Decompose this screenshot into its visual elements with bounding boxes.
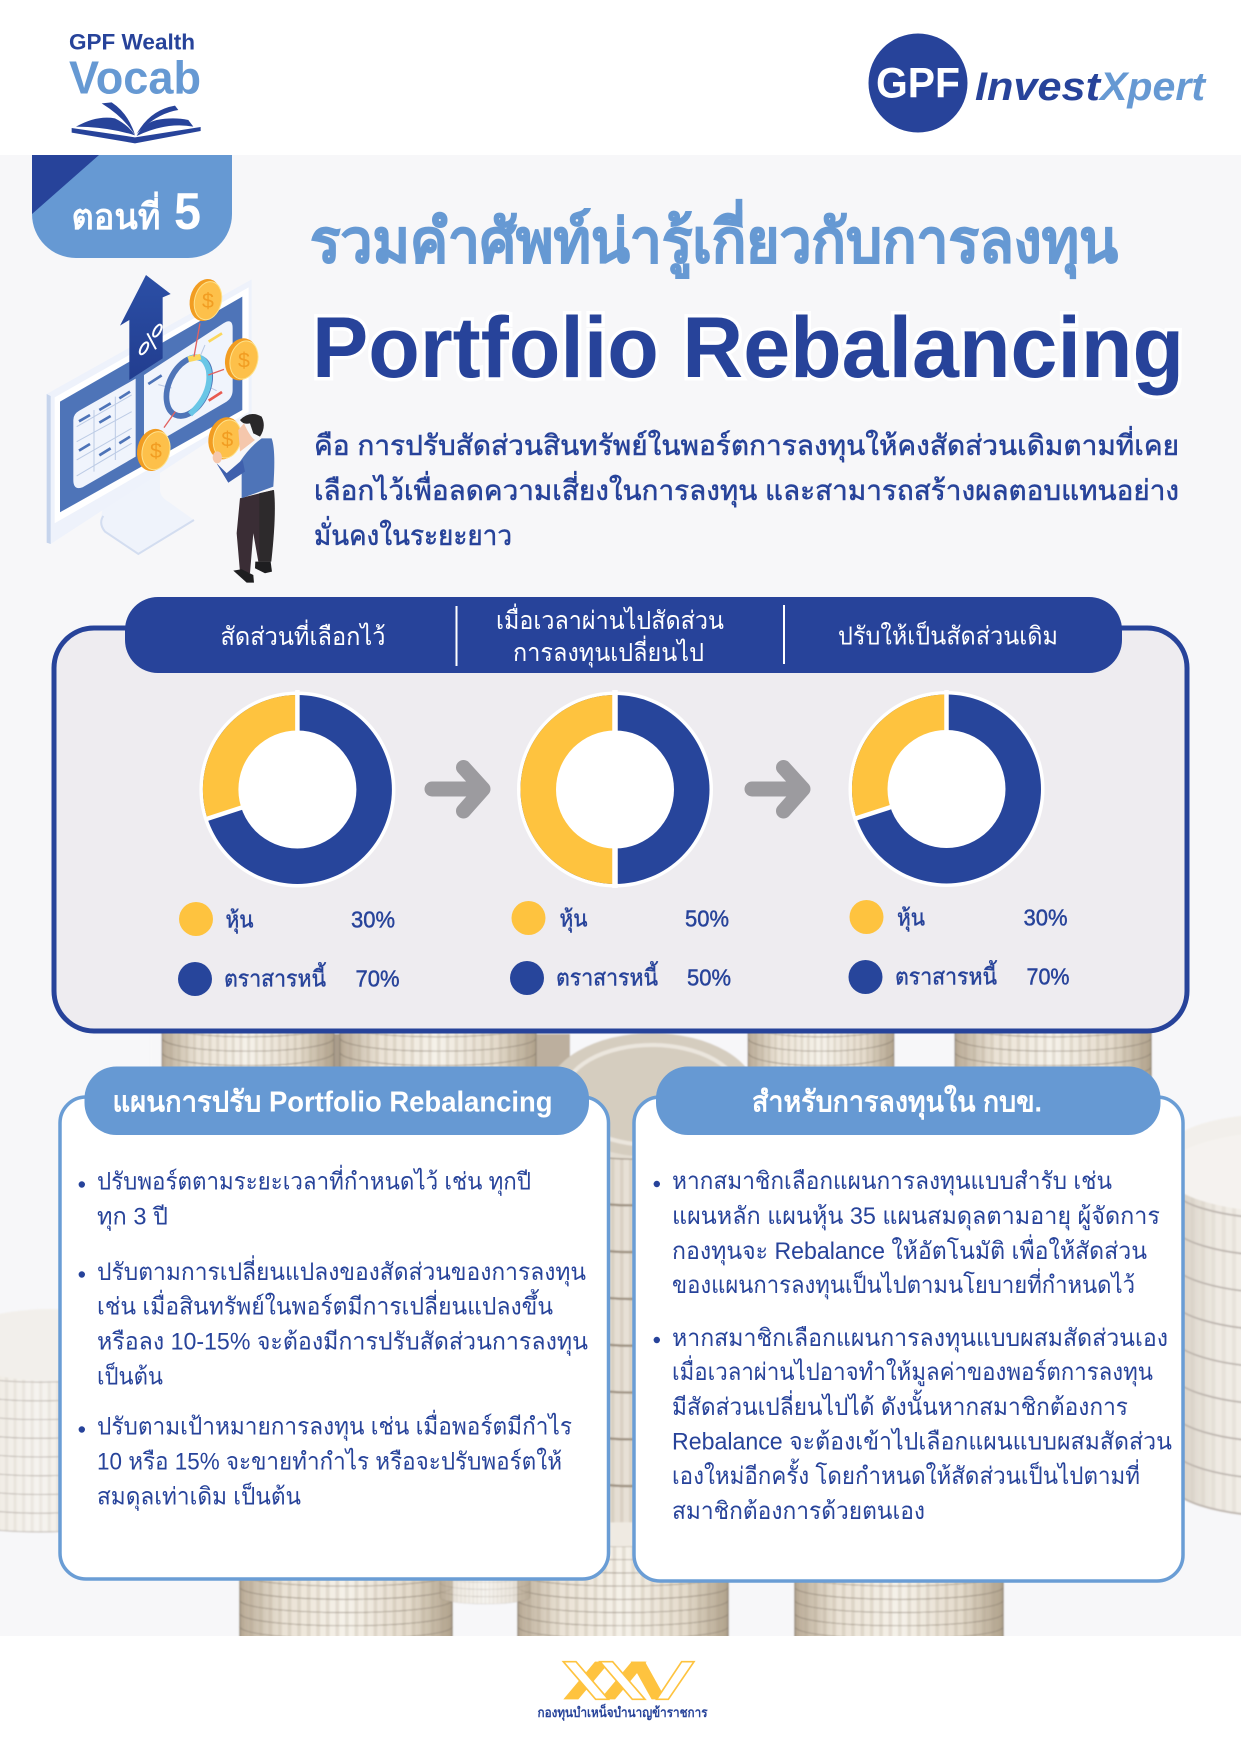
logo: Government Pension Fund: กองทุนบำเหน็จบำนาญข้าราชการ bbox=[538, 1703, 708, 1721]
illustration: investor at monitor with coins bbox=[47, 275, 275, 583]
logo: GPF InvestXpert bbox=[868, 34, 1207, 132]
title: Portfolio Rebalancing: Portfolio Rebalancing bbox=[312, 300, 1184, 396]
monitor stand bbox=[101, 470, 194, 554]
bullet list: หรือลง 10-15% จะต้องมีการปรับสัดส่วนการลงทุน bbox=[97, 1328, 588, 1356]
header bar: ปรับให้เป็นสัดส่วนเดิม bbox=[838, 620, 1058, 650]
upward arrow with percent bbox=[120, 275, 171, 380]
bullet list: ปรับตามเป้าหมายการลงทุน เช่น เมื่อพอร์ตมีกำไร bbox=[97, 1410, 572, 1442]
legend: third donut: หุ้น bbox=[897, 904, 925, 932]
bullet list bbox=[79, 1164, 588, 1512]
legend: third donut: 30% bbox=[1024, 904, 1068, 930]
logo: Government Pension Fund bbox=[538, 1662, 708, 1721]
footer band bbox=[0, 1636, 1241, 1754]
chart panel bbox=[144, 321, 233, 450]
legend: second donut: ตราสารหนี้ bbox=[556, 962, 658, 990]
illustration: investor at monitor with coins: $ bbox=[150, 439, 162, 463]
legend: third donut: 70% bbox=[1026, 964, 1070, 990]
logo: GPF InvestXpert: GPF bbox=[876, 60, 960, 108]
bullet list: สมดุลเท่าเดิม เป็นต้น bbox=[97, 1482, 301, 1512]
legend: first donut: 70% bbox=[356, 966, 400, 992]
panel: asset allocation donuts bbox=[54, 597, 1187, 1031]
monitor screen bbox=[60, 297, 242, 512]
definition text: คือ การปรับสัดส่วนสินทรัพย์ในพอร์ตการลงทุนให้คงสัดส่วนเดิมตามที่เคย bbox=[314, 426, 1179, 463]
bullet list: ทุก 3 ปี bbox=[97, 1204, 168, 1232]
logo: GPF Wealth Vocab: GPF Wealth bbox=[69, 30, 195, 54]
bullet list: มีสัดส่วนเปลี่ยนไปได้ ดังนั้นหากสมาชิกต้องการ bbox=[672, 1389, 1128, 1421]
episode tab: 5 bbox=[174, 183, 201, 241]
panel: GPF investment notes bbox=[634, 1066, 1183, 1581]
arrow bbox=[432, 768, 483, 811]
monitor frame bbox=[47, 279, 252, 544]
illustration: investor at monitor with coins: $ bbox=[221, 427, 233, 451]
bullet list: Rebalance จะต้องเข้าไปเลือกแผนแบบผสมสัดส่วน bbox=[672, 1428, 1172, 1456]
bullet list: เช่น เมื่อสินทรัพย์ในพอร์ตมีการเปลี่ยนแปลงขึ้น bbox=[97, 1288, 553, 1320]
donut chart: 50/50 drifted bbox=[517, 690, 713, 888]
donut chart: 30/70 chosen bbox=[199, 690, 395, 888]
heading pill: แผนการปรับ Portfolio Rebalancing bbox=[112, 1086, 552, 1118]
legend: first donut bbox=[178, 902, 400, 996]
logo: GPF InvestXpert: Invest bbox=[975, 65, 1102, 109]
bullet list: สมาชิกต้องการด้วยตนเอง bbox=[672, 1498, 925, 1525]
donut chart: 30/70 rebalanced bbox=[848, 690, 1044, 887]
arrow bbox=[752, 768, 803, 811]
bullet list: ของแผนการลงทุนเป็นไปตามนโยบายที่กำหนดไว้ bbox=[672, 1268, 1135, 1300]
bullet list: เมื่อเวลาผ่านไปอาจทำให้มูลค่าของพอร์ตการลงทุน bbox=[672, 1355, 1153, 1387]
episode tab bbox=[32, 155, 232, 258]
bullet list: หากสมาชิกเลือกแผนการลงทุนแบบสำรับ เช่น bbox=[672, 1168, 1112, 1196]
bullet list: เองใหม่อีกครั้ง โดยกำหนดให้สัดส่วนเป็นไปตามที่ bbox=[672, 1458, 1140, 1490]
logo: GPF Wealth Vocab: Vocab bbox=[69, 52, 201, 104]
episode tab: ตอนที่ bbox=[72, 191, 160, 237]
definition text: มั่นคงในระยะยาว bbox=[314, 516, 512, 551]
legend: third donut: ตราสารหนี้ bbox=[895, 960, 997, 990]
header bar: เมื่อเวลาผ่านไปสัดส่วน bbox=[496, 603, 724, 635]
coins bbox=[133, 276, 262, 475]
bullet list: หากสมาชิกเลือกแผนการลงทุนแบบผสมสัดส่วนเอง bbox=[672, 1325, 1168, 1353]
panel: rebalancing plans bbox=[60, 1066, 608, 1579]
header bar: สัดส่วนที่เลือกไว้ bbox=[220, 619, 386, 651]
investor figure bbox=[213, 414, 275, 583]
heading pill: สำหรับการลงทุนใน กบข. bbox=[752, 1084, 1042, 1120]
bullet list: แผนหลัก แผนหุ้น 35 แผนสมดุลตามอายุ ผู้จัดการ bbox=[672, 1203, 1160, 1231]
bullet list bbox=[654, 1168, 1172, 1525]
legend: second donut: 50% bbox=[685, 906, 729, 932]
header band bbox=[0, 0, 1241, 155]
header bar: การลงทุนเปลี่ยนไป bbox=[513, 635, 704, 668]
legend: second donut: 50% bbox=[687, 964, 731, 990]
bullet list: กองทุนจะ Rebalance ให้อัตโนมัติ เพื่อให้สัดส่วน bbox=[672, 1234, 1147, 1266]
bullet list: 10 หรือ 15% จะขายทำกำไร หรือจะปรับพอร์ตให้ bbox=[97, 1448, 562, 1476]
bullet list: ปรับพอร์ตตามระยะเวลาที่กำหนดไว้ เช่น ทุกปี bbox=[97, 1164, 531, 1196]
definition text: เลือกไว้เพื่อลดความเสี่ยงในการลงทุน และสามารถสร้างผลตอบแทนอย่าง bbox=[314, 471, 1179, 508]
bullet list: ปรับตามการเปลี่ยนแปลงของสัดส่วนของการลงทุน bbox=[97, 1255, 586, 1287]
header bar bbox=[125, 597, 1122, 673]
table panel bbox=[73, 379, 136, 488]
legend: first donut: 30% bbox=[351, 906, 395, 932]
bullet list: เป็นต้น bbox=[97, 1362, 163, 1390]
legend: third donut bbox=[848, 900, 1070, 994]
legend: second donut bbox=[510, 901, 731, 995]
illustration: investor at monitor with coins: $ bbox=[238, 348, 250, 372]
illustration: investor at monitor with coins: $ bbox=[202, 289, 214, 313]
legend: second donut: หุ้น bbox=[560, 906, 588, 932]
icon: open book bbox=[72, 102, 201, 143]
legend: first donut: ตราสารหนี้ bbox=[224, 962, 326, 992]
heading pill bbox=[84, 1066, 589, 1135]
title: Thai heading: รวมคำศัพท์น่ารู้เกี่ยวกับการลงทุน bbox=[310, 199, 1118, 279]
logo: GPF Wealth Vocab bbox=[69, 30, 201, 143]
background: coin stacks bbox=[0, 982, 1241, 1665]
legend: first donut: หุ้น bbox=[226, 906, 254, 934]
logo: GPF InvestXpert: Xpert bbox=[1098, 65, 1207, 109]
definition text bbox=[314, 426, 1179, 551]
heading pill bbox=[656, 1066, 1160, 1135]
